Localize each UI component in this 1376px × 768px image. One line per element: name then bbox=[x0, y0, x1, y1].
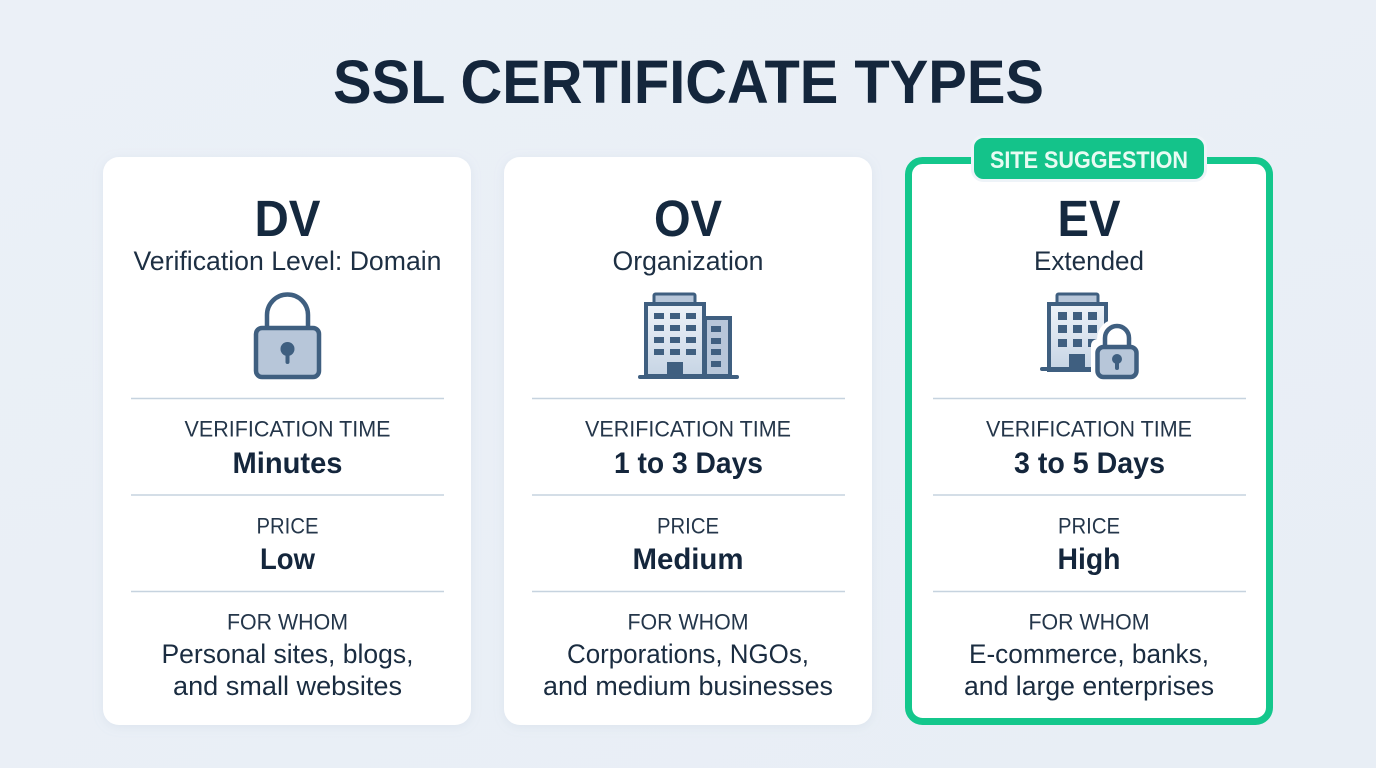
verification level: Organization bbox=[612, 246, 764, 276]
icon: office building bbox=[640, 294, 737, 377]
panel: DV bbox=[103, 157, 471, 725]
verification level: Verification Level: Domain bbox=[134, 246, 442, 276]
for whom: FOR WHOM bbox=[628, 610, 748, 634]
verification time: VERIFICATION TIME bbox=[986, 416, 1192, 442]
badge: site suggestion: SITE SUGGESTION bbox=[990, 147, 1188, 174]
price: Medium bbox=[632, 543, 744, 576]
verification level: Extended bbox=[1034, 246, 1144, 276]
for whom: and small websites bbox=[173, 671, 402, 701]
for whom: Corporations, NGOs, bbox=[567, 639, 809, 669]
price: PRICE bbox=[1058, 514, 1120, 538]
for whom: FOR WHOM bbox=[227, 610, 348, 634]
verification time: 3 to 5 Days bbox=[1014, 447, 1165, 480]
verification time bbox=[184, 416, 390, 480]
for whom bbox=[964, 610, 1214, 701]
verification time: Minutes bbox=[232, 447, 342, 480]
price: Low bbox=[260, 543, 315, 576]
badge: site suggestion bbox=[972, 136, 1206, 180]
panel: OV bbox=[504, 157, 872, 725]
for whom: Personal sites, blogs, bbox=[162, 639, 414, 669]
price: High bbox=[1058, 543, 1120, 576]
for whom: and medium businesses bbox=[543, 671, 833, 701]
heading: EV: EV bbox=[1058, 190, 1120, 247]
title: SSL CERTIFICATE TYPES bbox=[333, 48, 1044, 116]
price bbox=[632, 514, 744, 576]
price bbox=[1058, 514, 1120, 576]
price: PRICE bbox=[657, 514, 719, 538]
price bbox=[256, 514, 318, 576]
verification time bbox=[986, 416, 1192, 480]
icon: building with padlock bbox=[1042, 294, 1143, 382]
for whom: FOR WHOM bbox=[1028, 610, 1150, 634]
for whom bbox=[543, 610, 833, 701]
verification time: 1 to 3 Days bbox=[614, 447, 763, 480]
icon: padlock bbox=[256, 295, 319, 377]
heading: DV: DV bbox=[254, 190, 320, 247]
panel: EV (site suggestion) bbox=[908, 136, 1270, 722]
verification time: VERIFICATION TIME bbox=[184, 416, 390, 442]
verification time: VERIFICATION TIME bbox=[585, 416, 791, 442]
heading: OV: OV bbox=[654, 190, 722, 247]
for whom: and large enterprises bbox=[964, 671, 1214, 701]
for whom bbox=[162, 610, 414, 701]
verification time bbox=[585, 416, 791, 480]
price: PRICE bbox=[256, 514, 318, 538]
for whom: E-commerce, banks, bbox=[969, 639, 1209, 669]
